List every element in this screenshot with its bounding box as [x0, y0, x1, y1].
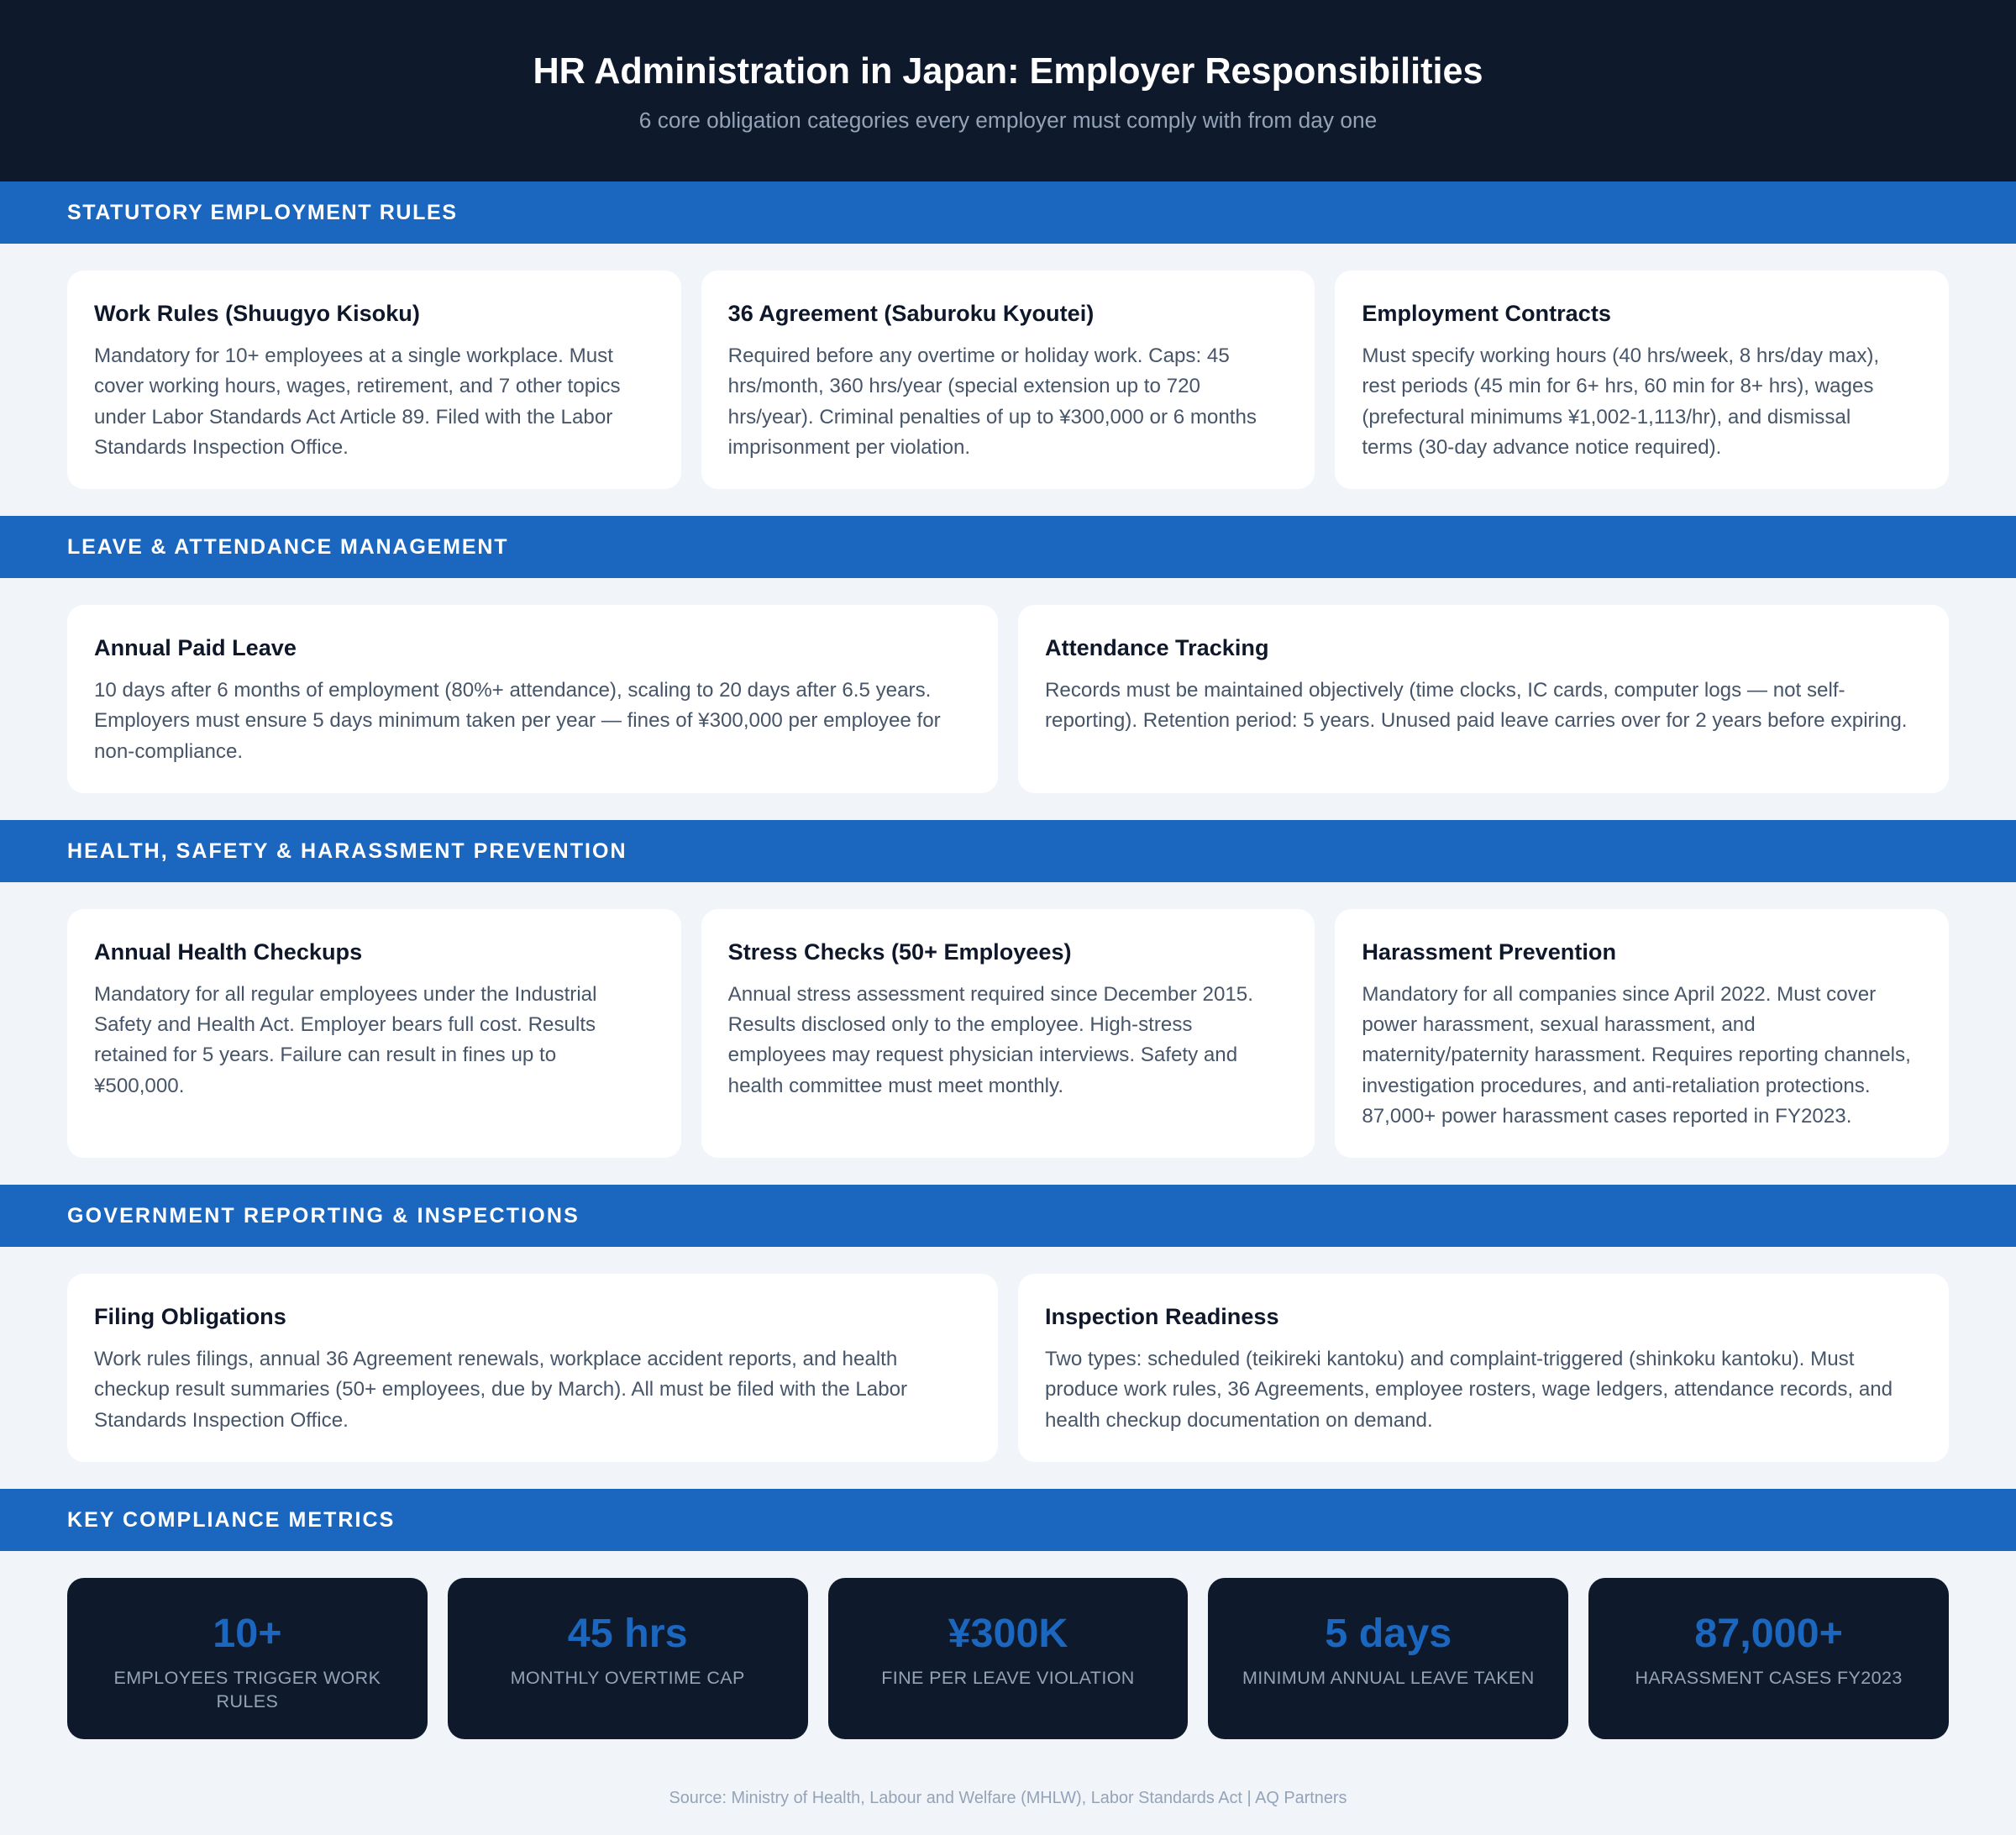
- card: stress checks: [701, 909, 1315, 1158]
- card: 36 agreement: 36 Agreement (Saburoku Kyoutei): [728, 300, 1094, 326]
- section heading: leave and attendance: [0, 516, 2016, 578]
- section heading: leave and attendance: LEAVE & ATTENDANCE MANAGEMENT: [67, 535, 508, 559]
- metric: fine: FINE PER LEAVE VIOLATION: [881, 1668, 1135, 1688]
- card: harassment prevention: Mandatory for all companies since April 2022. Must cover: [1362, 983, 1876, 1006]
- card: employment contracts: Employment Contracts: [1362, 300, 1611, 326]
- card: work rules: Mandatory for 10+ employees at a single workplace. Must: [94, 344, 613, 367]
- card: work rules: [67, 271, 681, 489]
- card: annual health checkups: ¥500,000.: [94, 1075, 184, 1097]
- card: harassment prevention: Harassment Prevention: [1362, 939, 1616, 965]
- card: annual health checkups: Annual Health Checkups: [94, 939, 362, 965]
- section heading: government reporting: [0, 1185, 2016, 1247]
- card: work rules: under Labor Standards Act Article 89. Filed with the Labor: [94, 406, 612, 429]
- section heading: key compliance metrics: [0, 1489, 2016, 1551]
- card: employment contracts: (prefectural minimums ¥1,002-1,113/hr), and dismissal: [1362, 406, 1851, 429]
- card: harassment prevention: investigation procedures, and anti-retaliation protections.: [1362, 1075, 1871, 1097]
- title: HR Administration in Japan: Employer Responsibilities: [533, 51, 1483, 92]
- card: attendance tracking: reporting). Retention period: 5 years. Unused paid leave carries over for 2 years before expiring.: [1045, 709, 1908, 732]
- panel: statutory employment rules cards: [67, 271, 1949, 489]
- metric: fine: ¥300K: [948, 1611, 1068, 1656]
- card: harassment prevention: power harassment, sexual harassment, and: [1362, 1013, 1756, 1036]
- card: annual health checkups: [67, 909, 681, 1158]
- metric: overtime cap: MONTHLY OVERTIME CAP: [511, 1668, 745, 1688]
- card: 36 agreement: [701, 271, 1315, 489]
- metric: employees threshold: 10+: [213, 1611, 282, 1656]
- card: annual health checkups: Safety and Health Act. Employer bears full cost. Results: [94, 1013, 596, 1036]
- card: employment contracts: [1335, 271, 1949, 489]
- metric: minimum leave: MINIMUM ANNUAL LEAVE TAKEN: [1242, 1668, 1535, 1688]
- card: 36 agreement: hrs/year). Criminal penalties of up to ¥300,000 or 6 months: [728, 406, 1257, 429]
- card: inspection readiness: Two types: scheduled (teikireki kantoku) and complaint-triggered (shinkoku kantoku). Must: [1045, 1348, 1854, 1370]
- section heading: key compliance metrics: KEY COMPLIANCE METRICS: [67, 1508, 395, 1532]
- section heading: statutory employment rules: [0, 181, 2016, 244]
- card: attendance tracking: Records must be maintained objectively (time clocks, IC cards, computer logs — not self-: [1045, 679, 1845, 702]
- card: 36 agreement: Required before any overtime or holiday work. Caps: 45: [728, 344, 1230, 367]
- card: inspection readiness: produce work rules, 36 Agreements, employee rosters, wage ledgers, attendance records, and: [1045, 1378, 1893, 1401]
- metric: minimum leave: 5 days: [1325, 1611, 1452, 1656]
- header banner: [0, 0, 2016, 181]
- section heading: health and safety: HEALTH, SAFETY & HARASSMENT PREVENTION: [67, 839, 627, 863]
- metric: employees threshold: RULES: [217, 1691, 278, 1711]
- card: stress checks: Results disclosed only to the employee. High-stress: [728, 1013, 1192, 1036]
- panel: leave and attendance cards: [67, 605, 1949, 793]
- card: work rules: cover working hours, wages, retirement, and 7 other topics: [94, 375, 621, 397]
- panel: health and safety cards: [67, 909, 1949, 1158]
- card: filing obligations: [67, 1274, 998, 1462]
- card: harassment prevention: 87,000+ power harassment cases reported in FY2023.: [1362, 1105, 1851, 1128]
- metric: harassment cases: HARASSMENT CASES FY2023: [1635, 1668, 1903, 1688]
- metric: overtime cap: 45 hrs: [568, 1611, 688, 1656]
- metric: harassment cases: [1588, 1578, 1949, 1739]
- card: attendance tracking: [1018, 605, 1949, 793]
- card: annual paid leave: 10 days after 6 months of employment (80%+ attendance), scaling to 20 days after 6.5 years.: [94, 679, 931, 702]
- card: attendance tracking: Attendance Tracking: [1045, 634, 1268, 660]
- card: employment contracts: rest periods (45 min for 6+ hrs, 60 min for 8+ hrs), wages: [1362, 375, 1873, 397]
- card: work rules: Work Rules (Shuugyo Kisoku): [94, 300, 420, 326]
- section heading: statutory employment rules: STATUTORY EMPLOYMENT RULES: [67, 201, 458, 224]
- metric: harassment cases: 87,000+: [1694, 1611, 1843, 1656]
- card: employment contracts: terms (30-day advance notice required).: [1362, 436, 1721, 459]
- card: inspection readiness: [1018, 1274, 1949, 1462]
- card: annual paid leave: Annual Paid Leave: [94, 634, 297, 660]
- card: filing obligations: Work rules filings, annual 36 Agreement renewals, workplace accident reports, and health: [94, 1348, 897, 1370]
- panel: government reporting cards: [67, 1274, 1949, 1462]
- card: annual paid leave: non-compliance.: [94, 740, 243, 763]
- card: harassment prevention: maternity/paternity harassment. Requires reporting channels,: [1362, 1044, 1911, 1066]
- metric: employees threshold: [67, 1578, 428, 1739]
- card: inspection readiness: health checkup documentation on demand.: [1045, 1409, 1433, 1432]
- card: stress checks: Annual stress assessment required since December 2015.: [728, 983, 1253, 1006]
- card: stress checks: health committee must meet monthly.: [728, 1075, 1063, 1097]
- card: annual paid leave: [67, 605, 998, 793]
- card: annual health checkups: retained for 5 years. Failure can result in fines up to: [94, 1044, 556, 1066]
- card: filing obligations: checkup result summaries (50+ employees, due by March). All must be filed with the Labor: [94, 1378, 907, 1401]
- card: annual paid leave: Employers must ensure 5 days minimum taken per year — fines of ¥300,000 per employee for: [94, 709, 941, 732]
- card: annual health checkups: Mandatory for all regular employees under the Industrial: [94, 983, 596, 1006]
- card: stress checks: Stress Checks (50+ Employees): [728, 939, 1072, 965]
- card: filing obligations: Standards Inspection Office.: [94, 1409, 349, 1432]
- metric: minimum leave: [1208, 1578, 1568, 1739]
- card: inspection readiness: Inspection Readiness: [1045, 1303, 1279, 1329]
- panel: metric cards: [67, 1578, 1949, 1739]
- card: 36 agreement: imprisonment per violation.: [728, 436, 970, 459]
- source footer: Source: Ministry of Health, Labour and Welfare (MHLW), Labor Standards Act | AQ Partners: [669, 1789, 1347, 1807]
- metric: overtime cap: [448, 1578, 808, 1739]
- card: stress checks: employees may request physician interviews. Safety and: [728, 1044, 1237, 1066]
- metric: fine: [828, 1578, 1188, 1739]
- section heading: government reporting: GOVERNMENT REPORTING & INSPECTIONS: [67, 1204, 580, 1228]
- card: work rules: Standards Inspection Office.: [94, 436, 349, 459]
- section heading: health and safety: [0, 820, 2016, 882]
- card: employment contracts: Must specify working hours (40 hrs/week, 8 hrs/day max),: [1362, 344, 1879, 367]
- card: harassment prevention: [1335, 909, 1949, 1158]
- metric: employees threshold: EMPLOYEES TRIGGER WORK: [113, 1668, 381, 1688]
- subtitle: 6 core obligation categories every employer must comply with from day one: [639, 108, 1377, 133]
- card: 36 agreement: hrs/month, 360 hrs/year (special extension up to 720: [728, 375, 1200, 397]
- card: filing obligations: Filing Obligations: [94, 1303, 286, 1329]
